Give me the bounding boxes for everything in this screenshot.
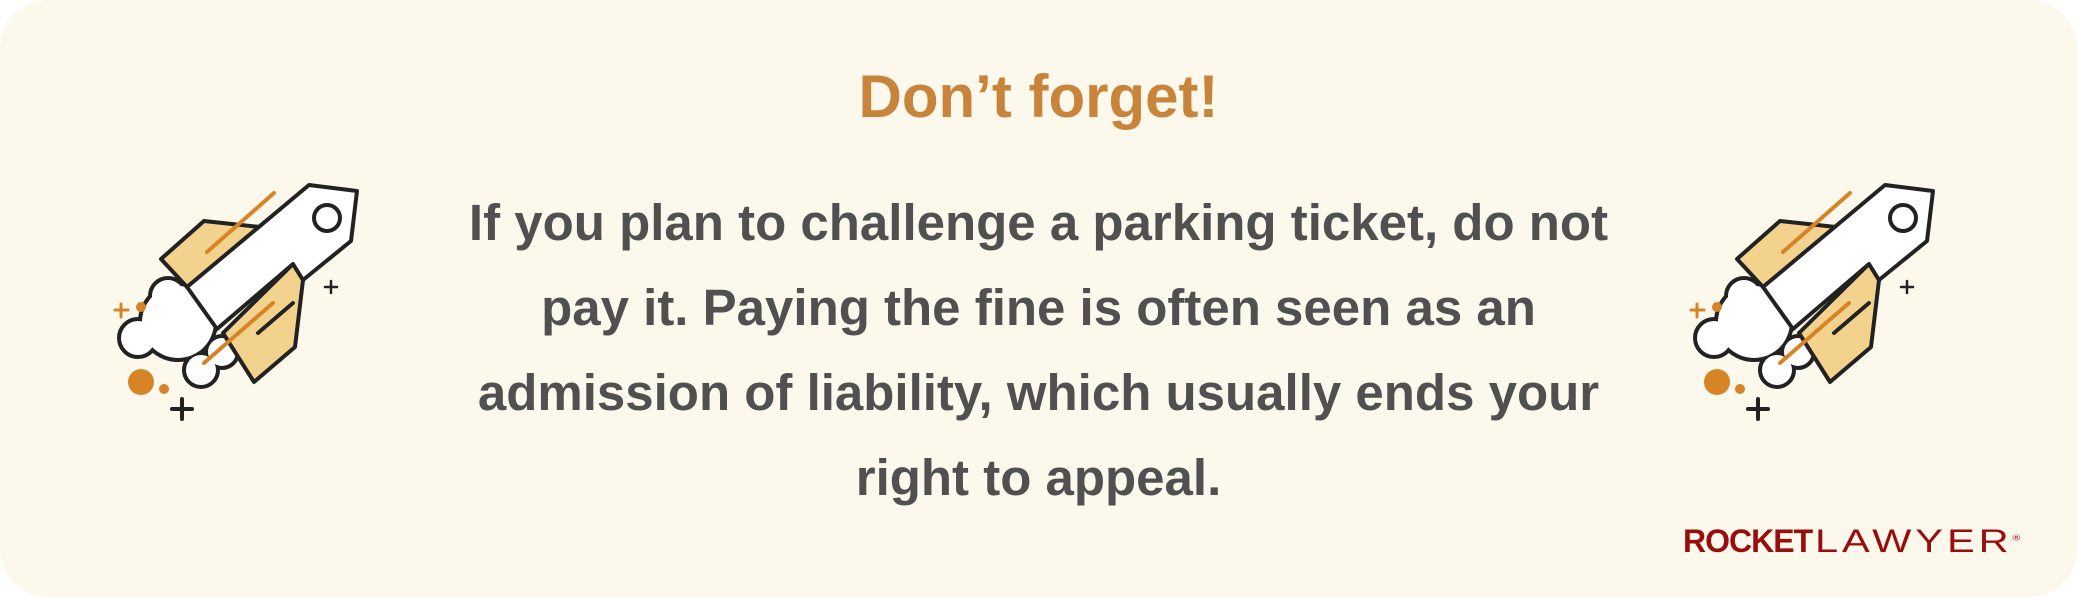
- icon: rocket left: [114, 183, 359, 421]
- logo: [1683, 523, 2024, 559]
- text block: message: If you plan to challenge a parking ticket, do not pay it. Paying the fine is often seen as an admission of liability, which usually ends your right to appeal.: [469, 194, 1608, 506]
- title: Don’t forget!: [859, 63, 1218, 130]
- icon: rocket right: [1690, 183, 1935, 421]
- logo: LAWYER®: [1815, 523, 2024, 559]
- logo: ROCKET: [1683, 523, 1812, 559]
